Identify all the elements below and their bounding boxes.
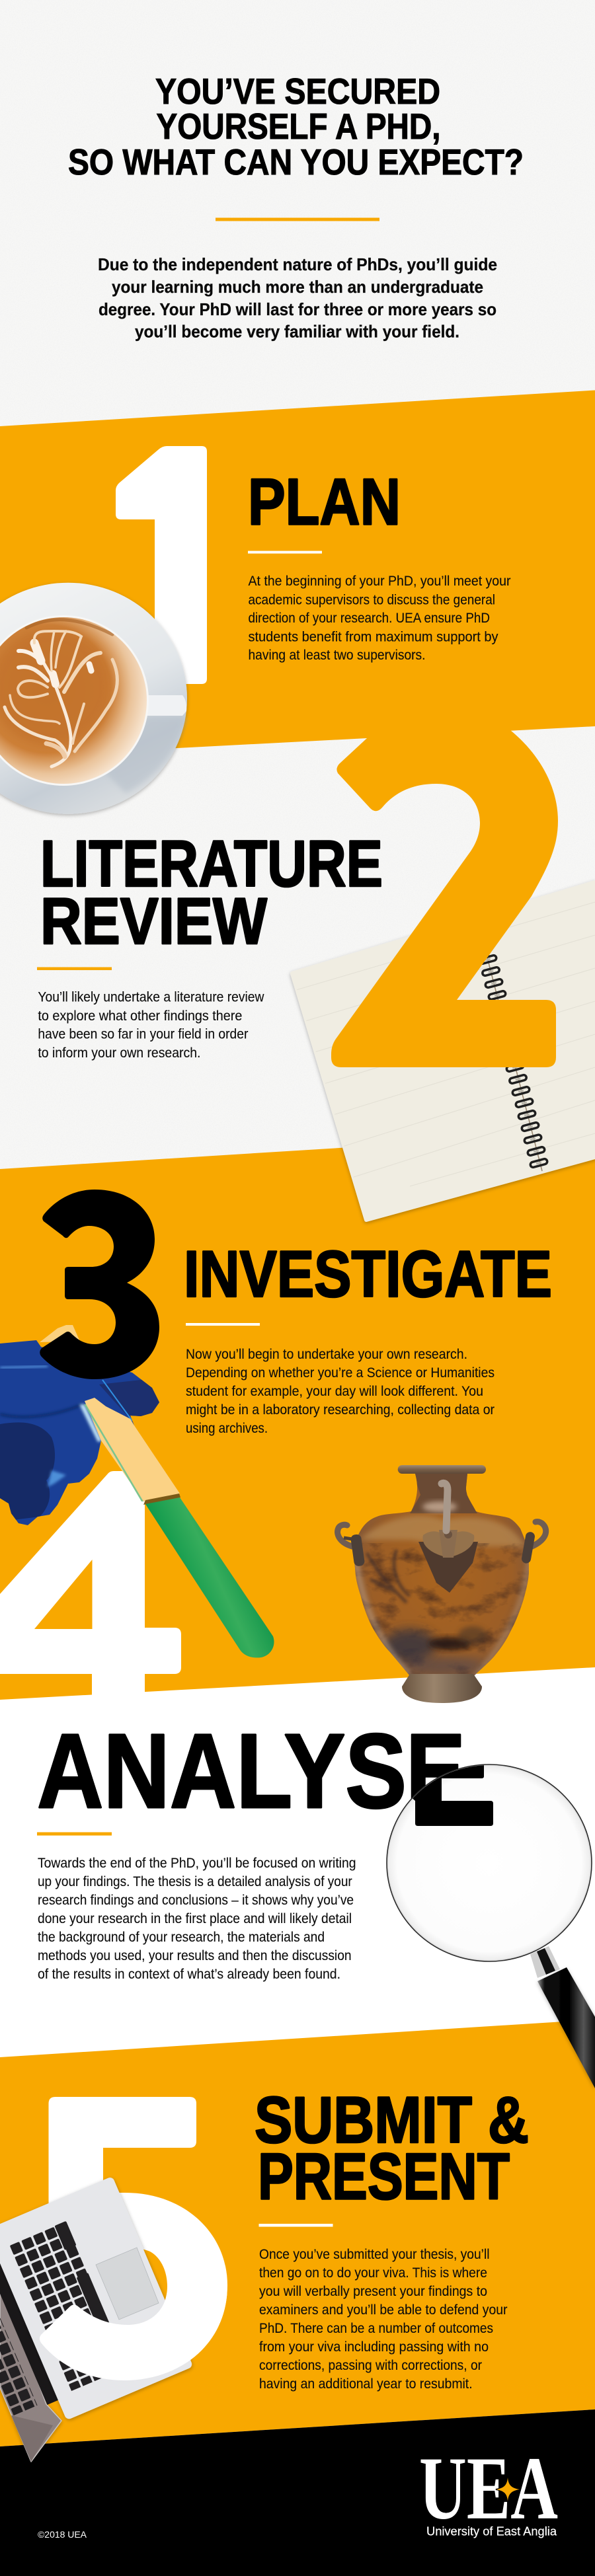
text: investigate: might be in a laboratory researching, collecting data or bbox=[186, 1402, 495, 1418]
text: analyse: up your findings. The thesis is a detailed analysis of your bbox=[38, 1874, 352, 1889]
heading: analyse: ANALYS bbox=[37, 1712, 407, 1830]
text: literature review: You’ll likely undertake a literature review bbox=[38, 990, 264, 1005]
text: analyse: of the results in context of what’s already been found. bbox=[38, 1967, 340, 1982]
orange band: section 3 bbox=[0, 1132, 595, 1700]
number 5 bbox=[40, 2097, 227, 2380]
text: investigate: Now you’ll begin to undertake your own research. bbox=[186, 1347, 467, 1362]
orange band: section 1 bbox=[0, 390, 595, 757]
title: SO WHAT CAN YOU EXPECT? bbox=[68, 141, 524, 182]
text: submit and present: Once you’ve submitted your thesis, you’ll bbox=[259, 2247, 489, 2262]
text: analyse: research findings and conclusions – it shows why you’ve bbox=[38, 1893, 354, 1908]
text: literature review: to inform your own research. bbox=[38, 1045, 200, 1061]
background: white lower section bbox=[0, 1652, 595, 2115]
text: plan: having at least two supervisors. bbox=[249, 648, 426, 663]
text: submit and present: examiners and you’ll be able to defend your bbox=[259, 2302, 508, 2318]
panel: submit and present bbox=[0, 2083, 529, 2462]
panel: analyse bbox=[37, 1712, 595, 2088]
icon: magnifying glass bbox=[387, 1745, 595, 2088]
icon: coffee cup bbox=[0, 583, 187, 814]
heading: literature review: LITERATURE bbox=[40, 827, 383, 900]
number 1 bbox=[116, 446, 207, 684]
panel: investigate bbox=[0, 1190, 552, 1703]
text: plan: At the beginning of your PhD, you’ll meet your bbox=[249, 574, 510, 589]
number 3 bbox=[40, 1190, 159, 1379]
intro text: degree. Your PhD will last for three or more years so bbox=[99, 299, 496, 319]
title: YOURSELF A PHD, bbox=[156, 106, 440, 147]
text: submit and present: having an additional year to resubmit. bbox=[259, 2376, 473, 2392]
icon: glove bbox=[0, 1340, 162, 1525]
heading: submit and present: PRESENT bbox=[258, 2140, 510, 2213]
text: literature review bbox=[38, 990, 264, 1061]
text: literature review: have been so far in your field in order bbox=[38, 1027, 248, 1042]
number 2 bbox=[331, 710, 558, 1067]
number 4 bbox=[0, 1471, 181, 1718]
intro text: Due to the independent nature of PhDs, you’ll guide bbox=[98, 254, 497, 274]
icon: notebook bbox=[292, 882, 595, 1220]
panel: plan bbox=[0, 390, 595, 814]
icon: vase bbox=[338, 1465, 546, 1703]
background: paper upper section bbox=[0, 0, 595, 1190]
heading: analyse: E bbox=[406, 1712, 465, 1830]
text: analyse: the background of your research, the materials and bbox=[38, 1930, 325, 1945]
text: plan: academic supervisors to discuss the general bbox=[249, 592, 495, 607]
text: submit and present: you will verbally present your findings to bbox=[259, 2284, 487, 2299]
intro text: your learning much more than an undergraduate bbox=[112, 277, 483, 297]
intro text: you’ll become very familiar with your field. bbox=[135, 321, 459, 341]
text: investigate: student for example, your day will look different. You bbox=[186, 1384, 483, 1399]
text: analyse: Towards the end of the PhD, you’ll be focused on writing bbox=[38, 1856, 356, 1871]
divider bbox=[37, 1832, 112, 1836]
title: YOU’VE SECURED bbox=[155, 71, 440, 112]
number 5: front part over laptop bbox=[40, 2293, 227, 2380]
divider bbox=[248, 551, 322, 554]
text: submit and present: PhD. There can be a number of outcomes bbox=[259, 2321, 493, 2336]
text: plan bbox=[249, 574, 510, 663]
footer: UEA logo: University of East Anglia bbox=[426, 2525, 557, 2538]
text: submit and present bbox=[259, 2247, 508, 2392]
orange band: section 5 bbox=[0, 2020, 595, 2446]
footer: copyright: ©2018 UEA bbox=[38, 2529, 87, 2540]
intro text bbox=[98, 254, 497, 341]
text: investigate bbox=[186, 1347, 495, 1436]
heading: plan: PLAN bbox=[248, 465, 401, 539]
text: plan: students benefit from maximum support by bbox=[249, 629, 498, 644]
text: submit and present: then go on to do your viva. This is where bbox=[259, 2265, 487, 2281]
text: plan: direction of your research. UEA ensure PhD bbox=[249, 611, 490, 626]
text: investigate: using archives. bbox=[186, 1421, 268, 1436]
heading: submit and present bbox=[255, 2083, 529, 2213]
icon: laptop bbox=[0, 2164, 193, 2462]
intro panel bbox=[68, 71, 524, 341]
heading: literature review: REVIEW bbox=[40, 884, 267, 958]
text: investigate: Depending on whether you’re a Science or Humanities bbox=[186, 1365, 495, 1381]
heading: submit and present: SUBMIT & bbox=[255, 2083, 529, 2156]
footer band bbox=[0, 2409, 595, 2576]
text: analyse: methods you used, your results and then the discussion bbox=[38, 1948, 352, 1963]
divider bbox=[259, 2224, 333, 2227]
text: analyse: done your research in the first place and will likely detail bbox=[38, 1911, 352, 1926]
text: submit and present: from your viva including passing with no bbox=[259, 2339, 489, 2355]
divider bbox=[37, 967, 112, 970]
heading: literature review bbox=[40, 827, 383, 958]
icon: test tube bbox=[40, 1325, 274, 1657]
divider bbox=[186, 1323, 260, 1326]
title bbox=[68, 71, 524, 182]
text: analyse bbox=[38, 1856, 356, 1982]
icon: star bbox=[496, 2478, 520, 2501]
text: submit and present: corrections, passing with corrections, or bbox=[259, 2358, 482, 2373]
panel: literature review bbox=[37, 710, 595, 1220]
text: literature review: to explore what other findings there bbox=[38, 1008, 242, 1024]
